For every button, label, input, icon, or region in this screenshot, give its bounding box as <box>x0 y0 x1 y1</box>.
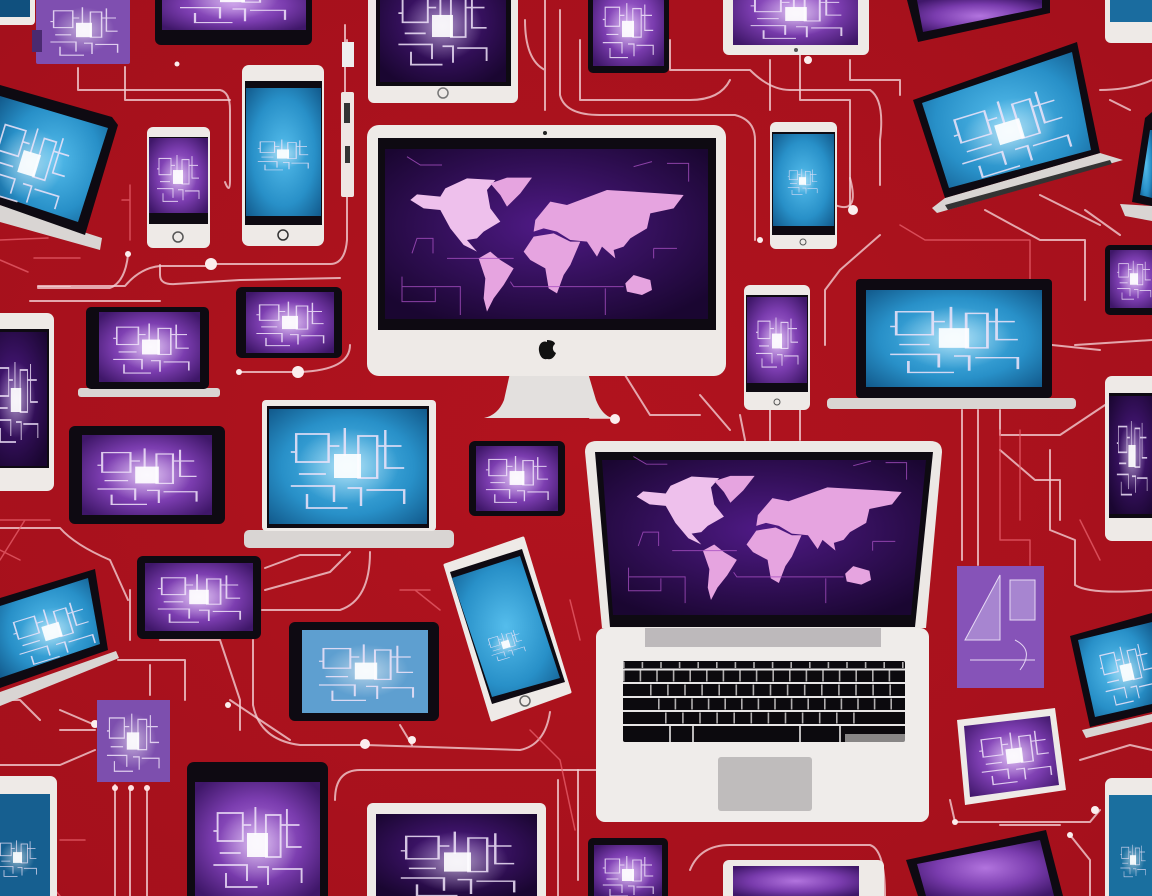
tablet: blue lower middle <box>289 622 439 721</box>
chip: white framed tilted <box>957 708 1066 805</box>
phone: blue upper left <box>242 65 324 246</box>
phone: purple center right <box>744 285 810 410</box>
tablet: purple small center <box>469 441 565 516</box>
laptop: tilted upper left <box>0 85 118 250</box>
phone: blue upper center <box>770 122 837 249</box>
phone: bottom right blue <box>1105 778 1152 896</box>
tablet: right edge purple <box>1105 245 1152 315</box>
tablet: top center white <box>368 0 518 103</box>
tablet: top row black <box>155 0 312 45</box>
tablet: purple left row four <box>69 426 225 524</box>
tablet: bottom left black <box>187 762 328 896</box>
laptop: tilted upper right <box>913 42 1123 213</box>
monitor stand <box>484 373 612 418</box>
tablet: bottom white wide <box>723 860 884 896</box>
logo mark <box>539 340 556 359</box>
trace nodes <box>91 56 1127 838</box>
connector: vertical cable adapter <box>341 42 354 197</box>
phone: tilted center <box>445 538 570 720</box>
tablet: bottom center white <box>367 803 546 896</box>
chip: purple right <box>957 566 1044 688</box>
phone: top left corner <box>0 0 35 25</box>
laptop: blue center left <box>244 400 454 548</box>
laptop: right edge partial <box>1120 112 1152 221</box>
phone: right edge purple <box>1105 376 1152 541</box>
laptop: purple left <box>78 307 220 397</box>
phone: purple upper left <box>147 127 210 248</box>
keyboard <box>623 661 905 743</box>
phone: left edge purple <box>0 313 54 491</box>
tablet: top right tilted <box>907 0 1050 42</box>
laptop: blue right <box>827 279 1076 409</box>
tablet: purple upper middle <box>236 287 342 358</box>
laptop: tilted right edge <box>1070 613 1152 738</box>
chip: purple top left <box>32 0 130 64</box>
laptop base <box>596 628 929 822</box>
laptop lid <box>585 441 942 628</box>
world map on laptop <box>629 456 907 603</box>
laptop: large white with world map <box>585 441 942 822</box>
tablet: top dark <box>588 0 669 73</box>
laptop: tilted lower left <box>0 569 119 706</box>
monitor: desktop computer with world map <box>367 125 726 418</box>
world map on monitor <box>402 157 689 315</box>
tablet: bottom right tilted <box>906 830 1063 896</box>
tablet: top white wide <box>723 0 869 55</box>
trackpad <box>718 757 812 811</box>
phone: top right corner <box>1105 0 1152 43</box>
chip: purple lower left with pins <box>97 700 170 791</box>
phone: bottom left blue <box>0 776 57 896</box>
tablet: bottom dark <box>588 838 668 896</box>
tablet: purple row five left <box>137 556 261 639</box>
